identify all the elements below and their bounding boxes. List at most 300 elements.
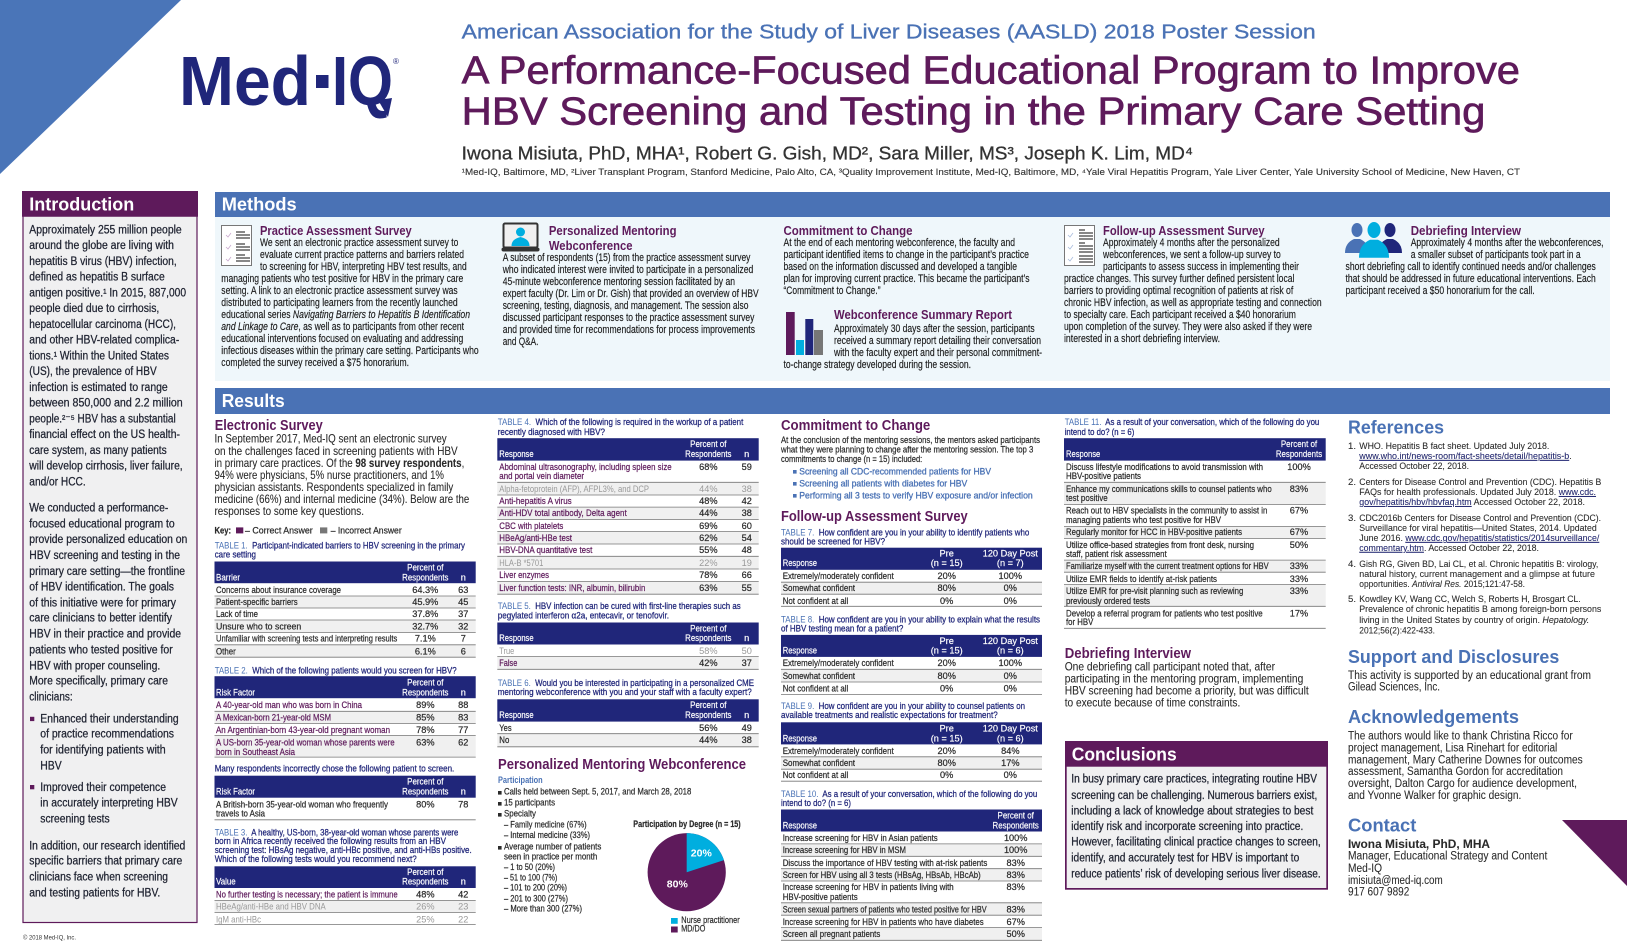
table 1: barriers: 45.9% <box>412 597 438 607</box>
table 5: cure <box>497 601 759 669</box>
table 7: identify confidence: (n = 15) <box>931 558 963 568</box>
table 3: next test: 22 <box>458 914 468 924</box>
table 1: barriers: Barrier <box>216 572 240 582</box>
electronic survey text: in primary care practices. Of the 98 survey respondents, <box>214 456 464 470</box>
table 4: workup: Anti-hepatitis A virus <box>499 496 572 506</box>
section: personalized mentoring webconference participation: – 1 to 50 (20%) <box>504 862 555 872</box>
text block: introduction paragraphs: financial effect on the US health- <box>29 429 180 441</box>
table 6: interest: TABLE 6. Would you be interested in participating in a personalized CME <box>498 678 754 688</box>
table 4: workup: Respondents <box>685 449 732 459</box>
text block: follow-up assessment survey: webconferences, we sent a follow-up survey to <box>1102 249 1281 261</box>
table 1: barriers: care setting <box>215 549 256 559</box>
title <box>462 49 1520 133</box>
text block: introduction paragraphs: of practice recommendations <box>40 729 174 741</box>
section: personalized mentoring webconference participation: Specialty <box>504 809 536 819</box>
table 2: risk factors: 63% <box>416 737 434 747</box>
table 1: barriers: Unsure who to screen <box>216 622 301 632</box>
table 4: workup: 44% <box>699 508 717 518</box>
table 9: counsel confidence: (n = 6) <box>997 733 1024 743</box>
table 9: counsel confidence: Somewhat confident <box>783 758 855 768</box>
table 6: interest: Response <box>499 710 534 720</box>
section: contact: Iwona Misiuta, PhD, MHA <box>1348 839 1490 851</box>
section: acknowledgements: Acknowledgements <box>1348 707 1519 727</box>
text block: personalized mentoring: Personalized Mentoring <box>549 223 677 238</box>
table 4: workup: 60 <box>742 521 752 531</box>
table 10: intentions: Increase screening for HBV in patients living with <box>783 882 954 892</box>
panel: conclusions <box>1065 741 1328 890</box>
table 5: cure: Response <box>499 633 534 643</box>
text block: introduction paragraphs: HBV screening and testing in the <box>29 550 180 562</box>
section: personalized mentoring webconference participation: Calls held between Sept. 5, 2017, and March 28, 2018 <box>504 787 691 797</box>
title: A Performance-Focused Educational Program to Improve <box>462 49 1520 92</box>
table 11: follow-up intentions: 33% <box>1290 586 1308 596</box>
table 6: interest: Percent of <box>690 700 727 710</box>
table 11: follow-up intentions: intend to do? (n = 6) <box>1065 427 1134 437</box>
pie chart: participation by degree: 20% <box>691 848 712 860</box>
table 4: workup: recently diagnosed with HBV? <box>498 427 605 437</box>
text block: follow-up assessment survey: chronic HBV infection, as well as appropriate testing and connection <box>1064 297 1322 309</box>
section: commitment to change: Performing all 3 tests to verify HBV exposure and/or infection <box>799 490 1033 500</box>
text block: introduction paragraphs: We conducted a performance- <box>29 503 168 515</box>
section: references: WHO. Hepatitis B fact sheet. Updated July 2018. <box>1359 441 1549 452</box>
table 1: barriers: 64.3% <box>412 585 438 595</box>
section: contact <box>1348 816 1548 898</box>
table 4: workup: n <box>744 449 749 459</box>
text block: practice assessment survey: to screening for HBV, interpreting HBV test results, and <box>260 261 467 273</box>
table 5: cure: n <box>744 633 749 643</box>
section: commitment to change: commitments to change (n = 15) included: <box>781 454 922 464</box>
table 3: next test: screening test: HBsAg negative, anti-HBc positive, and anti-HBs positive. <box>215 845 472 855</box>
section: acknowledgements <box>1348 707 1583 802</box>
text block: practice assessment survey: infectious diseases within the primary care setting. Participants who <box>221 345 479 357</box>
section: contact: imisiuta@med-iq.com <box>1348 875 1443 887</box>
pie chart: participation by degree: 80% <box>667 879 688 891</box>
legend <box>671 915 740 934</box>
table 4: workup: Liver enzymes <box>499 570 549 580</box>
table 7: identify confidence <box>781 527 1042 606</box>
table 1: barriers: Respondents <box>402 572 449 582</box>
text block: commitment to change <box>784 223 1030 297</box>
table 4: workup: CBC with platelets <box>499 521 564 531</box>
table 2b: incorrect patient: A British-born 35-year-old woman who frequently <box>216 799 388 809</box>
section: references: Prevalence of chronic hepatitis B among foreign-born persons <box>1359 604 1601 615</box>
table 3: next test: 25% <box>416 914 434 924</box>
table 1: barriers: Percent of <box>407 562 444 572</box>
table 11: follow-up intentions <box>1064 417 1326 628</box>
table 9: counsel confidence: TABLE 9. How confident are you in your ability to counsel patients on <box>781 701 1025 711</box>
table 11: follow-up intentions: 17% <box>1290 608 1308 618</box>
text block: practice assessment survey: completed the survey received a $75 honorarium. <box>221 357 409 369</box>
table 8: explain confidence: Extremely/moderately confident <box>783 658 894 668</box>
table 5: cure: pegylated interferon α2a, entecavir, or tenofovir. <box>498 611 669 621</box>
section: commitment to change: At the conclusion of the mentoring sessions, the mentors asked participants <box>781 435 1040 445</box>
table 7: identify confidence: (n = 7) <box>997 558 1024 568</box>
text block: personalized mentoring: and Q&A. <box>503 336 538 348</box>
affiliations: ¹Med-IQ, Baltimore, MD, ²Liver Transplant Program, Stanford Medicine, Palo Alto, CA, ³Quality Improvement Institute, Med-IQ, Baltimore, MD, ⁴Yale Viral Hepatitis Program, Yale Liver Center, Yale University School of Medicine, New Haven, CT <box>462 167 1521 177</box>
table 8: explain confidence: (n = 15) <box>931 646 963 656</box>
section: references: Surveillance for viral hepatitis—United States, 2014. Updated <box>1359 523 1597 534</box>
text block: introduction paragraphs: and testing patients for HBV. <box>29 888 160 900</box>
text block: practice assessment survey: educational series Navigating Barriers to Hepatitis B Identification <box>221 309 470 321</box>
section: references: 5. <box>1348 594 1356 605</box>
header: conference name: American Association for the Study of Liver Diseases (AASLD) 2018 Poster Session <box>462 20 1316 43</box>
electronic survey text: medicine (66%) and internal medicine (34%). Below are the <box>214 492 470 506</box>
table 3: next test: n <box>461 876 466 886</box>
section: personalized mentoring webconference participation: – Internal medicine (33%) <box>504 830 590 840</box>
icon: three people <box>1345 222 1402 258</box>
section: debriefing interview: to execute because of time constraints. <box>1065 696 1240 710</box>
table 8: explain confidence <box>781 614 1042 694</box>
table 3: next test <box>214 827 476 924</box>
table 4: workup: Percent of <box>690 439 727 449</box>
table 4: workup: 42 <box>742 496 752 506</box>
table 1: barriers: 7 <box>461 634 466 644</box>
section: references: References <box>1348 417 1444 437</box>
title: HBV Screening and Testing in the Primary Care Setting <box>462 90 1485 133</box>
table 11: follow-up intentions: TABLE 11. As a result of your conversation, which of the following do you <box>1065 417 1319 427</box>
table 3: next test: 26% <box>416 901 434 911</box>
text block: personalized mentoring <box>502 223 759 348</box>
table 4: workup: Anti-HDV total antibody, Delta agent <box>499 508 627 518</box>
text block: introduction paragraphs: specific barriers that primary care <box>29 856 182 868</box>
table 7: identify confidence: 0% <box>1004 596 1017 606</box>
table 10: intentions: 83% <box>1007 858 1025 868</box>
table 2: risk factors: TABLE 2. Which of the following patients would you screen for HBV? <box>215 665 457 675</box>
section: personalized mentoring webconference participation: 15 participants <box>504 798 555 808</box>
section: personalized mentoring webconference participation: – 101 to 200 (20%) <box>504 883 567 893</box>
table 10: intentions: Screen for HBV using all 3 tests (HBsAg, HBsAb, HBcAb) <box>783 870 981 880</box>
text block: introduction paragraphs: of HBV identification. The goals <box>29 582 174 594</box>
text block: commitment to change: “Commitment to Change.” <box>784 285 881 297</box>
table 7: identify confidence: TABLE 7. How confident are you in your ability to identify patients who <box>781 527 1029 537</box>
table 1: barriers: Patient-specific barriers <box>216 597 298 607</box>
table 9: counsel confidence: 20% <box>938 746 956 756</box>
table 11: follow-up intentions: test positive <box>1066 493 1108 503</box>
panel: introduction <box>22 191 198 922</box>
table 1: barriers: 37.8% <box>412 609 438 619</box>
table 1: barriers: 32 <box>458 622 468 632</box>
section: references: June 2016. www.cdc.gov/hepatitis/statistics/2014surveillance/ <box>1359 533 1600 544</box>
section: references: www.who.int/news-room/fact-sheets/detail/hepatitis-b. <box>1358 451 1572 462</box>
table 2: risk factors: n <box>461 688 466 698</box>
table 3: next test: Which of the following tests would you recommend next? <box>215 854 417 864</box>
text block: introduction paragraphs: primary care setting—the frontline <box>29 566 185 578</box>
table 4: workup: 55 <box>742 583 752 593</box>
table 11: follow-up intentions: Reach out to HBV specialists in the community to assist in <box>1066 505 1267 515</box>
table 9: counsel confidence: Pre <box>940 723 954 733</box>
table 11: follow-up intentions: managing patients who test positive for HBV <box>1066 515 1222 525</box>
text block: practice assessment survey: managing patients who test positive for HBV in the primary care <box>221 273 463 285</box>
section: commitment to change: Commitment to Change <box>781 418 930 434</box>
table 5: cure: True <box>499 646 514 656</box>
table 2: risk factors: 62 <box>458 737 468 747</box>
table 3: next test: Respondents <box>402 876 449 886</box>
section: debriefing interview: One debriefing call participant noted that, after <box>1065 660 1275 674</box>
table 3: next test: HBeAg/anti-HBe and HBV DNA <box>216 901 326 911</box>
table 8: explain confidence: 80% <box>938 671 956 681</box>
section: references: 1. <box>1348 441 1356 452</box>
table 5: cure: Respondents <box>685 633 732 643</box>
text block: introduction paragraphs: HBV with proper counseling. <box>29 661 160 673</box>
electronic survey text: 94% were physicians, 5% nurse practitioners, and 1% <box>214 468 444 482</box>
table 2: risk factors: Percent of <box>407 678 444 688</box>
text block: introduction paragraphs: will develop cirrhosis, liver failure, <box>28 460 183 472</box>
table 4: workup: Abdominal ultrasonography, including spleen size <box>499 462 672 472</box>
panel: methods <box>215 192 1610 381</box>
table 11: follow-up intentions: Utilize EMR for pre-visit planning such as reviewing <box>1066 586 1243 596</box>
section: references: Accessed October 22, 2018. <box>1359 461 1469 472</box>
table 11: follow-up intentions: 67% <box>1290 527 1308 537</box>
table 8: explain confidence: Response <box>783 646 817 656</box>
table 4: workup: Response <box>499 449 534 459</box>
text block: personalized mentoring: Webconference <box>549 238 632 253</box>
text block: introduction paragraphs: screening tests <box>40 814 110 826</box>
text block: introduction paragraphs: infection is estimated to range <box>29 382 168 394</box>
text block: introduction paragraphs: (US), the prevalence of HBV <box>29 366 157 378</box>
text block: personalized mentoring: screening, testing, diagnosis, and management. The session also <box>503 300 749 312</box>
icon: follow-up checklist <box>1064 226 1094 266</box>
table 7: identify confidence: Extremely/moderately confident <box>783 571 894 581</box>
section: references: CDC2016b Centers for Disease Control and Prevention (CDC). <box>1359 513 1601 524</box>
section: acknowledgements: and Yvonne Walker for graphic design. <box>1348 790 1521 802</box>
logo: Med-IQ: Med <box>179 42 311 120</box>
table 3: next test: No further testing is necessary; the patient is immune <box>216 889 398 899</box>
text block: conclusions body: However, facilitating clinical practice changes to screen, <box>1071 837 1321 849</box>
table 3: next test: 23 <box>458 901 468 911</box>
table 8: explain confidence: TABLE 8. How confident are you in your ability to explain what the results <box>781 614 1040 624</box>
text block: follow-up assessment survey: Approximately 4 months after the personalized <box>1103 237 1280 249</box>
table 10: intentions: Response <box>783 820 817 830</box>
table 11: follow-up intentions: 83% <box>1290 484 1308 494</box>
section: references: Gish RG, Given BD, Lai CL, et al. Chronic hepatitis B: virology, <box>1359 559 1598 570</box>
table 5: cure: 37 <box>742 658 752 668</box>
table 6: interest: No <box>499 735 509 745</box>
table 8: explain confidence: 100% <box>999 658 1022 668</box>
section: debriefing interview: participating in the mentoring program, implementing <box>1065 671 1303 685</box>
table 9: counsel confidence: Not confident at all <box>783 770 848 780</box>
electronic survey text: on the challenges faced in screening patients with HBV <box>214 444 458 458</box>
table 3: next test: born in Africa recently received the following results from an HBV <box>215 836 447 846</box>
text block: introduction paragraphs: tions.¹ Within the United States <box>29 350 169 362</box>
text block: introduction paragraphs: for identifying patients with <box>40 745 166 757</box>
table 9: counsel confidence: (n = 15) <box>931 733 963 743</box>
table 2b: incorrect patient: 80% <box>416 799 434 809</box>
table 11: follow-up intentions: staff, patient risk assessment <box>1066 549 1167 559</box>
table 6: interest: Yes <box>499 723 512 733</box>
corner triangle: blue <box>0 0 181 174</box>
key: Key: <box>214 525 231 535</box>
table 10: intentions: Screen all pregnant patients <box>783 929 881 939</box>
table 10: intentions: 83% <box>1007 882 1025 892</box>
table 10: intentions: 83% <box>1007 904 1025 914</box>
table 7: identify confidence: 120 Day Post <box>983 548 1038 558</box>
table 10: intentions: intend to do? (n = 6) <box>781 798 851 808</box>
table 8: explain confidence: Not confident at all <box>783 683 848 693</box>
table 7: identify confidence: 100% <box>999 571 1022 581</box>
text block: conclusions body: including a lack of knowledge about strategies to best <box>1071 806 1314 818</box>
text block: webconference summary report: Webconference Summary Report <box>834 307 1013 322</box>
table 4: workup: TABLE 4. Which of the following is required in the workup of a patient <box>498 417 744 427</box>
table 10: intentions: Respondents <box>993 820 1039 830</box>
section: references: Centers for Disease Control and Prevention (CDC). Hepatitis B <box>1359 477 1601 488</box>
icon: checklist <box>222 226 252 266</box>
table 4: workup: Alpha-fetoprotein (AFP), AFPL3%, and DCP <box>499 484 649 494</box>
table 4: workup: 54 <box>742 533 752 543</box>
authors: Iwona Misiuta, PhD, MHA¹, Robert G. Gish, MD², Sara Miller, MS³, Joseph K. Lim, MD⁴ <box>462 143 1193 163</box>
table 7: identify confidence: 80% <box>938 583 956 593</box>
text block: personalized mentoring: and provided time for recommendations for process improvements <box>503 324 755 336</box>
section: references: 2012;56(2):422-433. <box>1359 626 1435 636</box>
text block: debriefing interview: Debriefing Interview <box>1411 223 1522 238</box>
text block: commitment to change: based on the information discussed and developed a tangible <box>784 261 1017 273</box>
section: references: gov/hepatitis/hbv/hbvfaq.htm Accessed October 22, 2018. <box>1359 497 1585 508</box>
table 5: cure: 58% <box>699 646 717 656</box>
table 4: workup: 22% <box>699 558 717 568</box>
heading: follow-up assessment survey: Follow-up Assessment Survey <box>781 509 968 525</box>
table 4: workup: 44% <box>699 484 717 494</box>
table 8: explain confidence: 0% <box>940 683 953 693</box>
text block: conclusions body: screening can be challenging. Numerous barriers exist, <box>1071 790 1317 802</box>
section: contact: Manager, Educational Strategy and Content <box>1348 851 1548 863</box>
section: debriefing interview: HBV screening had become a priority, but was difficult <box>1065 683 1309 697</box>
table 9: counsel confidence: 17% <box>1001 758 1019 768</box>
table 11: follow-up intentions: Regularly monitor for HCC in HBV-positive patients <box>1066 527 1242 537</box>
text block: conclusions body: reduce patients’ risk of developing serious liver disease. <box>1071 869 1321 881</box>
table 1: barriers: Lack of time <box>216 609 258 619</box>
section: contact: Med-IQ <box>1348 863 1382 875</box>
table 6: interest: 49 <box>742 723 752 733</box>
table 10: intentions: Percent of <box>998 810 1034 820</box>
table 2: risk factors: Respondents <box>402 688 449 698</box>
section: personalized mentoring webconference participation: Average number of patients <box>504 842 602 852</box>
table 4: workup: HLA-B *5701 <box>499 558 543 568</box>
text block: introduction paragraphs: focused educational program to <box>29 518 175 530</box>
table 11: follow-up intentions: previously ordered tests <box>1066 596 1150 606</box>
text block: follow-up assessment survey <box>1064 223 1322 345</box>
text block: introduction paragraphs: clinicians: <box>29 692 73 704</box>
table 2: risk factors: born in Southeast Asia <box>216 747 296 757</box>
text block: debriefing interview: a smaller subset of participants took part in a <box>1411 249 1581 261</box>
table 4: workup: and portal vein diameter <box>499 471 584 481</box>
table 9: counsel confidence: 0% <box>1004 770 1017 780</box>
table 3: next test: Value <box>216 876 236 886</box>
table 11: follow-up intentions: Response <box>1066 449 1100 459</box>
text block: introduction paragraphs: and other HBV-related complica- <box>29 334 179 346</box>
section: acknowledgements: oversight, Dalton Cargo for audience development, <box>1348 778 1577 790</box>
text block: introduction paragraphs: hepatocellular carcinoma (HCC), <box>29 319 176 331</box>
key <box>214 525 402 535</box>
legend: Nurse practitioner <box>681 915 740 925</box>
table 2b: incorrect patient: 78 <box>458 799 468 809</box>
table 4: workup: 48% <box>699 496 717 506</box>
table 2: risk factors: 78% <box>416 725 434 735</box>
table 8: explain confidence: 0% <box>1004 683 1017 693</box>
table 10: intentions: 100% <box>1004 833 1027 843</box>
table 4: workup: Liver function tests: INR, albumin, bilirubin <box>499 583 645 593</box>
table 6: interest: 56% <box>699 723 717 733</box>
table 8: explain confidence: (n = 6) <box>997 646 1024 656</box>
table 4: workup: 62% <box>699 533 717 543</box>
text block: introduction paragraphs <box>28 224 187 900</box>
table 1: barriers: 32.7% <box>412 622 438 632</box>
table 2b: incorrect patient: Percent of <box>407 776 444 786</box>
text block: introduction paragraphs: between 850,000 and 2.2 million <box>29 398 183 410</box>
table 9: counsel confidence: 80% <box>938 758 956 768</box>
text block: introduction paragraphs: antigen positive.¹ In 2015, 887,000 <box>29 287 186 299</box>
table 1: barriers: 37 <box>458 609 468 619</box>
section: debriefing interview: Debriefing Interview <box>1065 646 1192 662</box>
text block: practice assessment survey: We sent an electronic practice assessment survey to <box>260 237 458 249</box>
section: acknowledgements: The authors would like to thank Christina Ricco for <box>1348 730 1573 742</box>
table 11: follow-up intentions: Develop a referral program for patients who test positive <box>1066 608 1263 618</box>
section: acknowledgements: management, Mary Catherine Downes for outcomes <box>1348 755 1583 767</box>
table 6: interest: 44% <box>699 735 717 745</box>
table 5: cure: False <box>499 658 517 668</box>
table 11: follow-up intentions: Enhance my communications skills to counsel patients who <box>1066 484 1272 494</box>
text block: conclusions body: identify, and accurately test for HBV is important to <box>1071 852 1299 864</box>
table 4: workup: 69% <box>699 521 717 531</box>
table 10: intentions: Screen sexual partners of patients who tested positive for HBV <box>783 904 987 914</box>
text block: webconference summary report: to-change strategy developed during the session. <box>784 359 971 371</box>
text block: introduction paragraphs: care clinicians to better identify <box>29 613 172 625</box>
table 9: counsel confidence: available treatments and realistic expectations for treatment? <box>781 710 998 720</box>
table 1: barriers: 6.1% <box>415 646 436 656</box>
text block: webconference summary report: with the faculty expert and their personal commitment- <box>833 347 1042 359</box>
results header bar <box>215 388 1610 414</box>
table 4: workup: HBV-DNA quantitative test <box>499 545 593 555</box>
icon: bar chart <box>786 312 823 355</box>
section: references: 3. <box>1348 513 1356 524</box>
section: references: 2. <box>1348 477 1356 488</box>
text block: commitment to change: plan for improving current practice. This became the participant’s <box>784 273 1030 285</box>
heading: methods: Methods <box>222 194 297 215</box>
table 1: barriers: Unfamiliar with screening tests and interpreting results <box>216 634 398 644</box>
table 5: cure: 42% <box>699 658 717 668</box>
section: commitment to change <box>780 418 1040 500</box>
table 10: intentions: 67% <box>1007 917 1025 927</box>
text block: debriefing interview: participant received a $50 honorarium for the call. <box>1346 285 1535 297</box>
heading: results: Results <box>222 390 285 411</box>
text block: follow-up assessment survey: practice changes. This survey further defined persistent local <box>1064 273 1294 285</box>
table 10: intentions: HBV-positive patients <box>783 892 858 902</box>
text block: introduction paragraphs: Enhanced their understanding <box>40 714 179 726</box>
table 1: barriers: n <box>461 572 466 582</box>
table 11: follow-up intentions: for HBV <box>1066 617 1094 627</box>
table 10: intentions: 100% <box>1004 845 1027 855</box>
text block: follow-up assessment survey: participants to assess success in implementing their <box>1103 261 1299 273</box>
heading: conclusions: Conclusions <box>1072 744 1177 764</box>
logo: Med-IQ: ® <box>393 57 399 66</box>
text block: commitment to change: Commitment to Change <box>784 223 912 238</box>
table 8: explain confidence: of HBV testing mean for a patient? <box>781 623 903 633</box>
table 6: interest: Respondents <box>685 710 732 720</box>
text block: introduction paragraphs: HBV in their practice and provide <box>29 629 181 641</box>
table 2: risk factors: 85% <box>416 712 434 722</box>
table 10: intentions: Increase screening for HBV in patients who have diabetes <box>783 917 984 927</box>
text block: webconference summary report: received a summary report detailing their conversation <box>834 335 1041 347</box>
icon: laptop <box>502 224 540 252</box>
table 4: workup: 48 <box>742 545 752 555</box>
table 4: workup: 78% <box>699 570 717 580</box>
table 2b: incorrect patient: travels to Asia <box>216 808 266 818</box>
text block: introduction paragraphs: More specifically, primary care <box>29 676 168 688</box>
table 11: follow-up intentions: 33% <box>1290 561 1308 571</box>
table 4: workup: 66 <box>742 570 752 580</box>
section: support and disclosures <box>1348 647 1591 694</box>
section: references: natural history, current management and a glimpse at future <box>1359 569 1595 580</box>
text block: follow-up assessment survey: Follow-up Assessment Survey <box>1103 223 1265 238</box>
text block: introduction paragraphs: around the globe are living with <box>29 240 174 252</box>
